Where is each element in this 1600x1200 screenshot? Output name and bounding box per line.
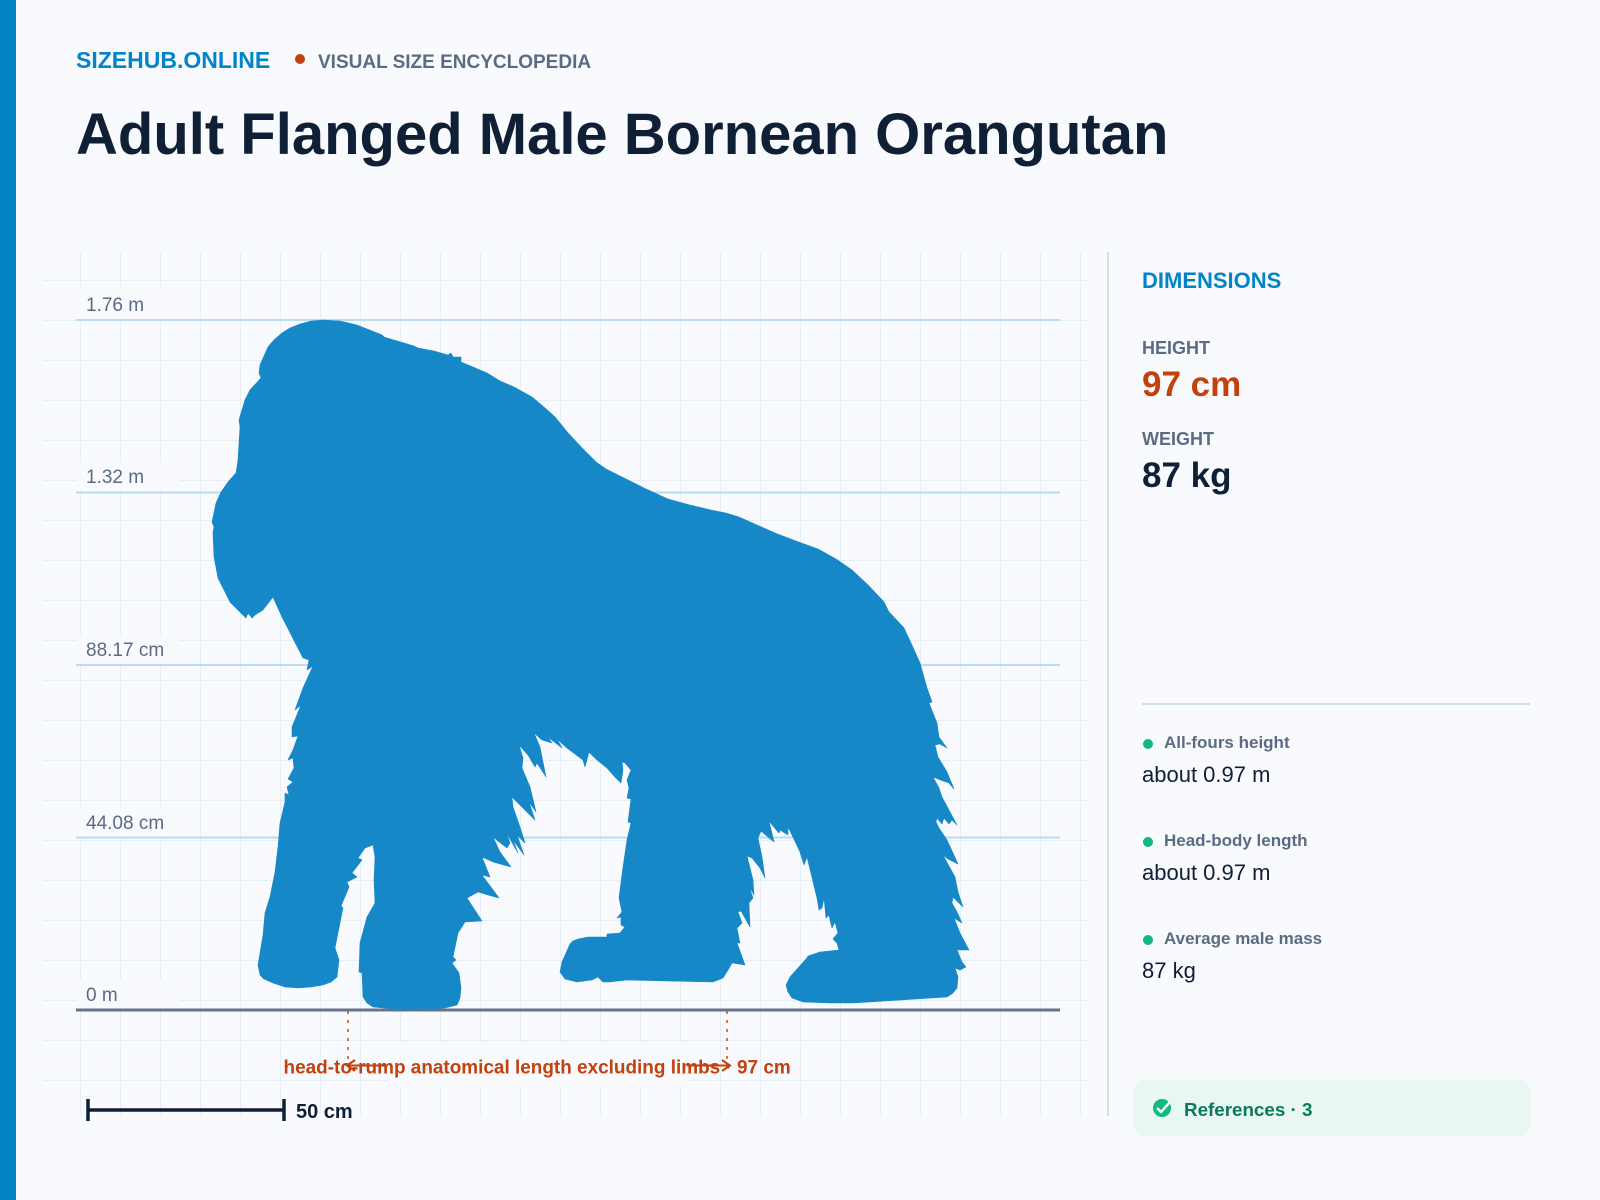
scale bar: 50 cm [296,1101,353,1123]
height labels: 88.17 cm [86,640,164,661]
panel divider [1107,252,1109,1116]
chart: size comparison [44,252,1088,1123]
baseline [76,1008,1060,1012]
orangutan silhouette [212,320,969,1010]
weight stat [1142,429,1232,495]
length annotation [284,1011,791,1078]
fact: head-body length [1142,831,1308,885]
references badge: References · 3 [1184,1099,1312,1120]
fact: average male mass: 87 kg [1142,958,1196,983]
weight stat: WEIGHT [1142,429,1214,449]
brand separator dot [295,54,305,64]
fact: head-body length: about 0.97 m [1142,860,1270,885]
dimensions heading: DIMENSIONS [1142,268,1281,293]
height stat [1142,338,1241,404]
height stat: 97 cm [1142,365,1241,404]
length annotation: head-to-rump anatomical length excluding limbs · 97 cm [284,1058,791,1078]
fact: average male mass [1142,929,1322,983]
height labels: 1.76 m [86,295,144,316]
weight stat: 87 kg [1142,456,1232,495]
fact: average male mass: Average male mass [1164,929,1322,948]
header [76,47,1168,167]
height labels: 44.08 cm [86,813,164,834]
brand name: SIZEHUB.ONLINE [76,47,270,73]
title: Adult Flanged Male Bornean Orangutan [76,102,1168,167]
height labels: 1.32 m [86,467,144,488]
fact: all-fours height [1142,733,1290,787]
icon: check [1153,1099,1171,1117]
references badge [1134,1080,1530,1136]
scale bar [88,1099,353,1123]
tagline: VISUAL SIZE ENCYCLOPEDIA [318,52,591,73]
left accent bar [0,0,16,1200]
height labels: 0 m [86,985,118,1006]
height stat: HEIGHT [1142,338,1210,358]
panel: dimensions [1134,268,1530,1136]
fact: all-fours height: All-fours height [1164,733,1290,752]
height labels [86,295,164,1006]
fact: head-body length: Head-body length [1164,831,1308,850]
fact: all-fours height: about 0.97 m [1142,762,1270,787]
